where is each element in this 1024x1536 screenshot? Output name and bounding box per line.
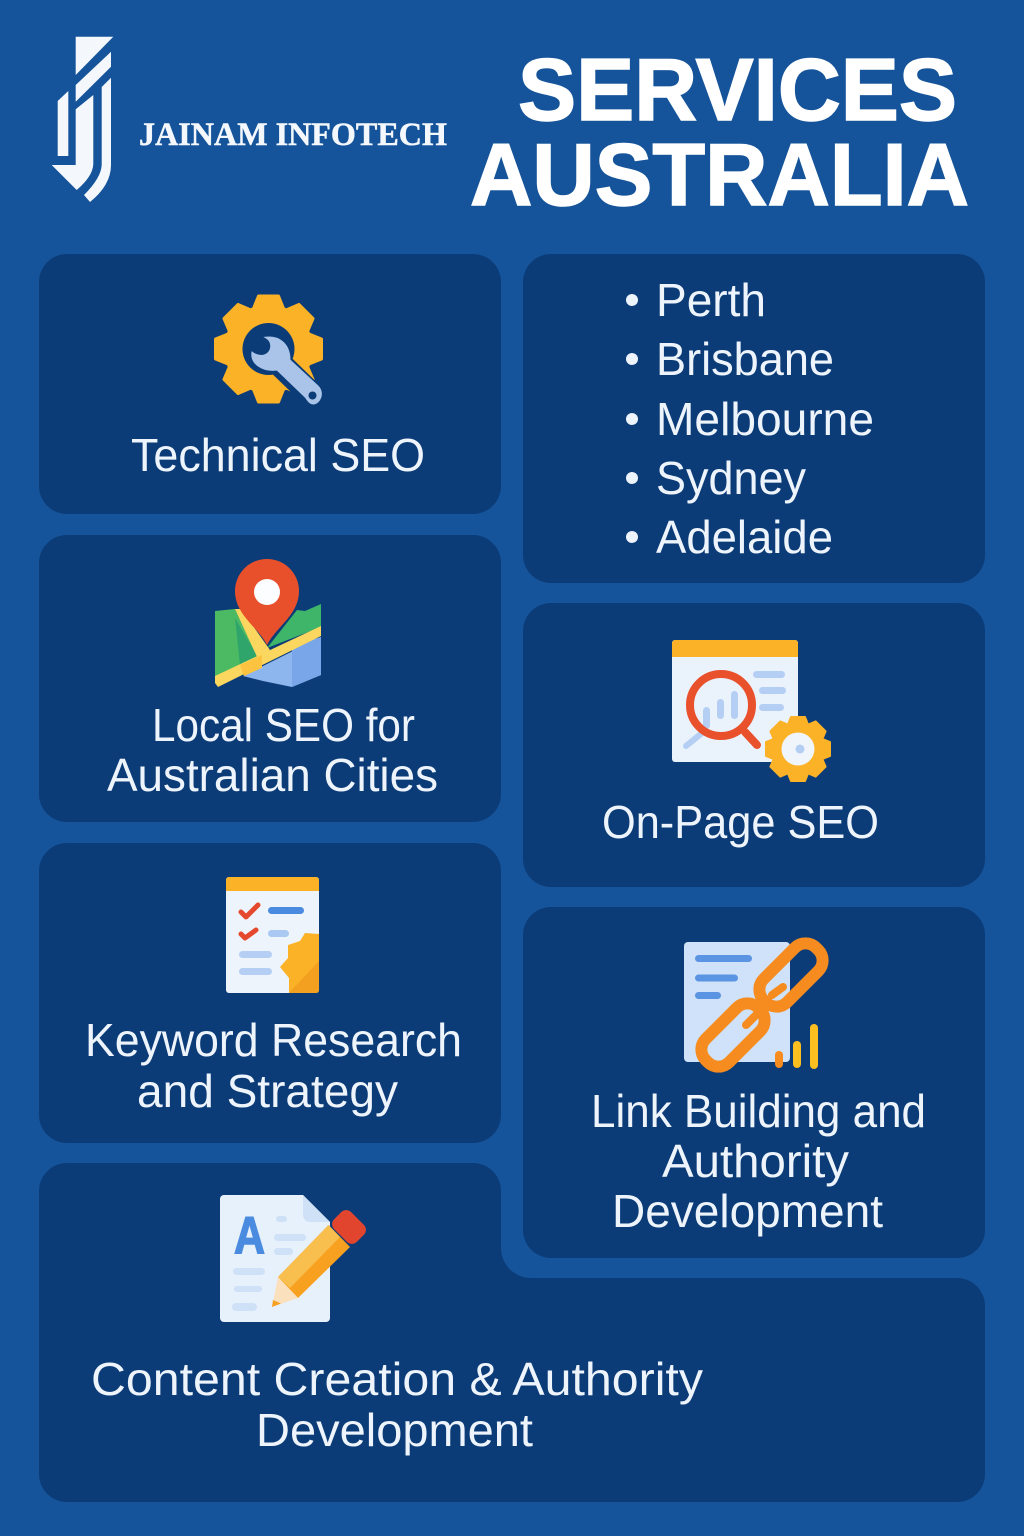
label: keyword research: and Strategy [137,1065,398,1117]
label: link building: Link Building and [591,1085,926,1137]
label: local SEO: Australian Cities [107,749,438,801]
label: on-page SEO: On-Page SEO [602,796,879,848]
panel: link building [523,907,985,1258]
logo wordmark: JAINAM INFOTECH [139,117,447,153]
panel: local SEO [39,535,501,822]
label: local SEO [107,699,438,801]
label: local SEO: Local SEO for [152,699,415,751]
panel: content creation [39,1163,985,1502]
panel: technical SEO [39,254,501,514]
title: AUSTRALIA [470,125,969,224]
icon: page with magnifier and gear [672,640,830,781]
icon: map with pin [215,559,321,687]
title [470,40,969,224]
label: keyword research: Keyword Research [85,1014,462,1066]
list: Australian cities: Sydney [656,452,806,504]
list: Australian cities: Adelaide [656,511,833,563]
icon: document with chain link [684,937,829,1073]
panel: keyword research [39,843,501,1143]
label: link building: Authority [662,1135,849,1187]
label: content creation [91,1353,703,1456]
list: Australian cities: Melbourne [656,393,874,445]
list: Australian cities [626,274,874,563]
label: content creation: Development [256,1404,533,1456]
icon: document and pencil: A [234,1207,265,1265]
list: Australian cities: Perth [656,274,766,326]
icon: gear and wrench [216,296,322,404]
title: SERVICES [518,40,957,139]
icon: document and pencil [220,1195,369,1322]
label: link building: Development [612,1185,883,1237]
label: technical SEO: Technical SEO [131,429,425,481]
label: content creation: Content Creation & Authority [91,1353,703,1405]
logo mark [52,37,113,202]
panel: on-page SEO [523,603,985,887]
label: keyword research [85,1014,462,1117]
list: Australian cities: Brisbane [656,333,834,385]
label: link building [591,1085,926,1237]
icon: checklist document [226,877,319,993]
panel: cities [523,254,985,583]
